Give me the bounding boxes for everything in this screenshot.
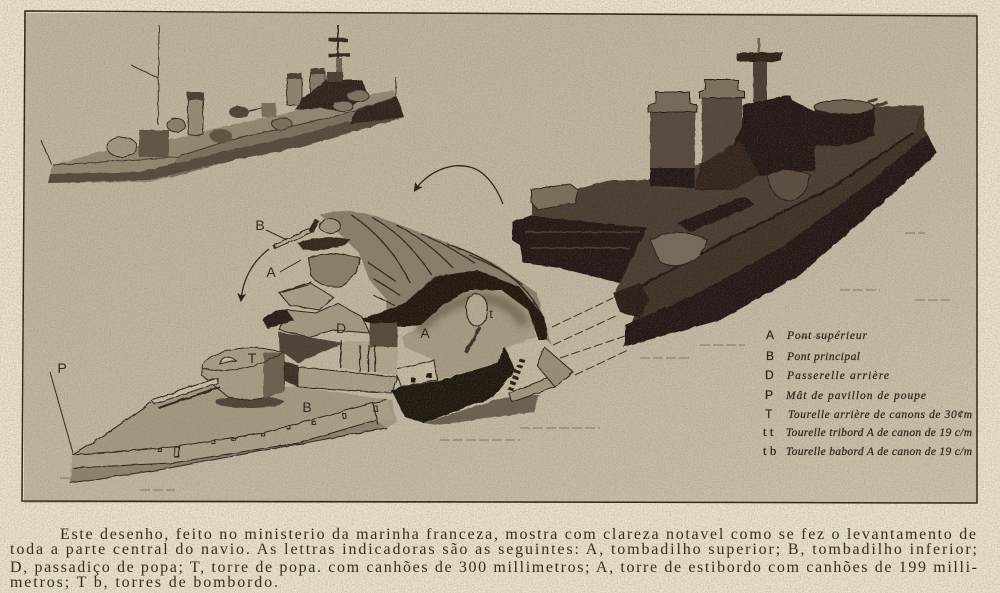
label D: D bbox=[336, 320, 346, 336]
portholes bbox=[159, 406, 377, 457]
legend text P: Mât de pavillon de poupe bbox=[785, 390, 926, 402]
legend text B: Pont principal bbox=[786, 351, 860, 363]
superstructure wall bbox=[298, 367, 397, 393]
legend letters tb: t b bbox=[763, 443, 776, 458]
torn stern bbox=[509, 370, 569, 402]
small ship funnels bbox=[188, 97, 203, 136]
large ship stacked cut decks bbox=[512, 215, 660, 284]
large ship funnels bbox=[650, 110, 695, 189]
legend letter P: P bbox=[765, 388, 773, 402]
inner shading bbox=[418, 297, 525, 330]
large ship mast bbox=[758, 38, 760, 52]
legend text T: Tourelle arrière de canons de 30¢m bbox=[788, 409, 972, 421]
inner turret bbox=[466, 294, 487, 326]
arrow: rotation left bbox=[241, 249, 269, 300]
small ship: intact battleship bbox=[41, 25, 404, 183]
cut ship hull bbox=[70, 385, 396, 483]
legend letter B: B bbox=[766, 349, 774, 363]
legend text A: Pont supérieur bbox=[786, 330, 868, 342]
large ship hull bbox=[613, 105, 937, 347]
caption line 1: Este desenho, feito no ministerio da marinha franceza, mostra com clareza notavel como se fez o levantamento de bbox=[60, 526, 976, 543]
labels on the middle ship bbox=[50, 217, 493, 453]
label B lower: B bbox=[302, 399, 312, 415]
P mast line bbox=[50, 372, 73, 453]
ladder bbox=[510, 358, 523, 390]
legend letter T: T bbox=[765, 407, 773, 421]
label P: P bbox=[57, 360, 67, 376]
panel: engraving frame bbox=[22, 11, 977, 503]
cut section box bbox=[394, 360, 437, 387]
rolled deck upper shell bbox=[319, 211, 552, 345]
label T: T bbox=[248, 350, 257, 366]
label A lower: A bbox=[420, 325, 430, 341]
deck plates bbox=[280, 284, 333, 310]
water hatching bbox=[423, 395, 539, 425]
caption bbox=[10, 526, 977, 591]
caption line 2: toda a parte central do navio. As lettras indicadoras são as seguintes: A, tombadilho superior; B, tombadilho inferior; bbox=[10, 541, 977, 558]
upper turret bbox=[309, 254, 360, 287]
legend bbox=[763, 328, 972, 458]
label lines bbox=[266, 230, 301, 272]
large ship bridge bbox=[725, 95, 815, 185]
large ship turret lower bbox=[650, 232, 707, 266]
turret T guns bbox=[151, 378, 217, 404]
large ship: bow section bbox=[512, 38, 937, 347]
passage D bbox=[280, 303, 370, 337]
large ship dark gun bbox=[677, 196, 755, 232]
black water cut bbox=[391, 347, 515, 423]
label A upper: A bbox=[266, 264, 276, 280]
label t: t bbox=[489, 306, 493, 321]
upper guns bbox=[273, 220, 317, 247]
small ship masts bbox=[41, 25, 396, 165]
caption line 4: metros; T b, torres de bombordo. bbox=[10, 574, 278, 591]
water strokes bbox=[60, 233, 950, 490]
caption line 3: D, passadiço de popa; T, torre de popa. com canhões de 300 millimetros; A, torre de estibordo com canhões de 199 milli- bbox=[10, 559, 977, 576]
legend letters tt: t t bbox=[763, 424, 774, 439]
dark deck block bbox=[279, 332, 344, 363]
legend text tt: Tourelle tribord A de canon de 19 c/m bbox=[786, 427, 972, 439]
large ship turret upper bbox=[815, 101, 875, 146]
small ship turrets bbox=[107, 137, 137, 157]
columns bbox=[341, 340, 397, 375]
legend letter D: D bbox=[765, 368, 774, 382]
legend letter A: A bbox=[766, 328, 774, 342]
label B upper: B bbox=[255, 217, 265, 233]
large ship rear turret bbox=[531, 184, 578, 210]
legend text D: Passerelle arrière bbox=[786, 370, 889, 382]
rolled deck inner surface bbox=[402, 290, 537, 380]
dashed connection lines bbox=[552, 298, 628, 375]
arrow: rotation right bbox=[415, 166, 503, 204]
turret T bbox=[215, 396, 284, 408]
small ship hull bbox=[48, 90, 404, 183]
large ship turret middle bbox=[767, 170, 810, 201]
middle ship: cross-section with rolled-up deck bbox=[70, 211, 573, 483]
large ship deck bbox=[532, 105, 923, 297]
legend text tb: Tourelle babord A de canon de 19 c/m bbox=[786, 446, 972, 458]
rolled deck black curl bbox=[359, 270, 547, 340]
